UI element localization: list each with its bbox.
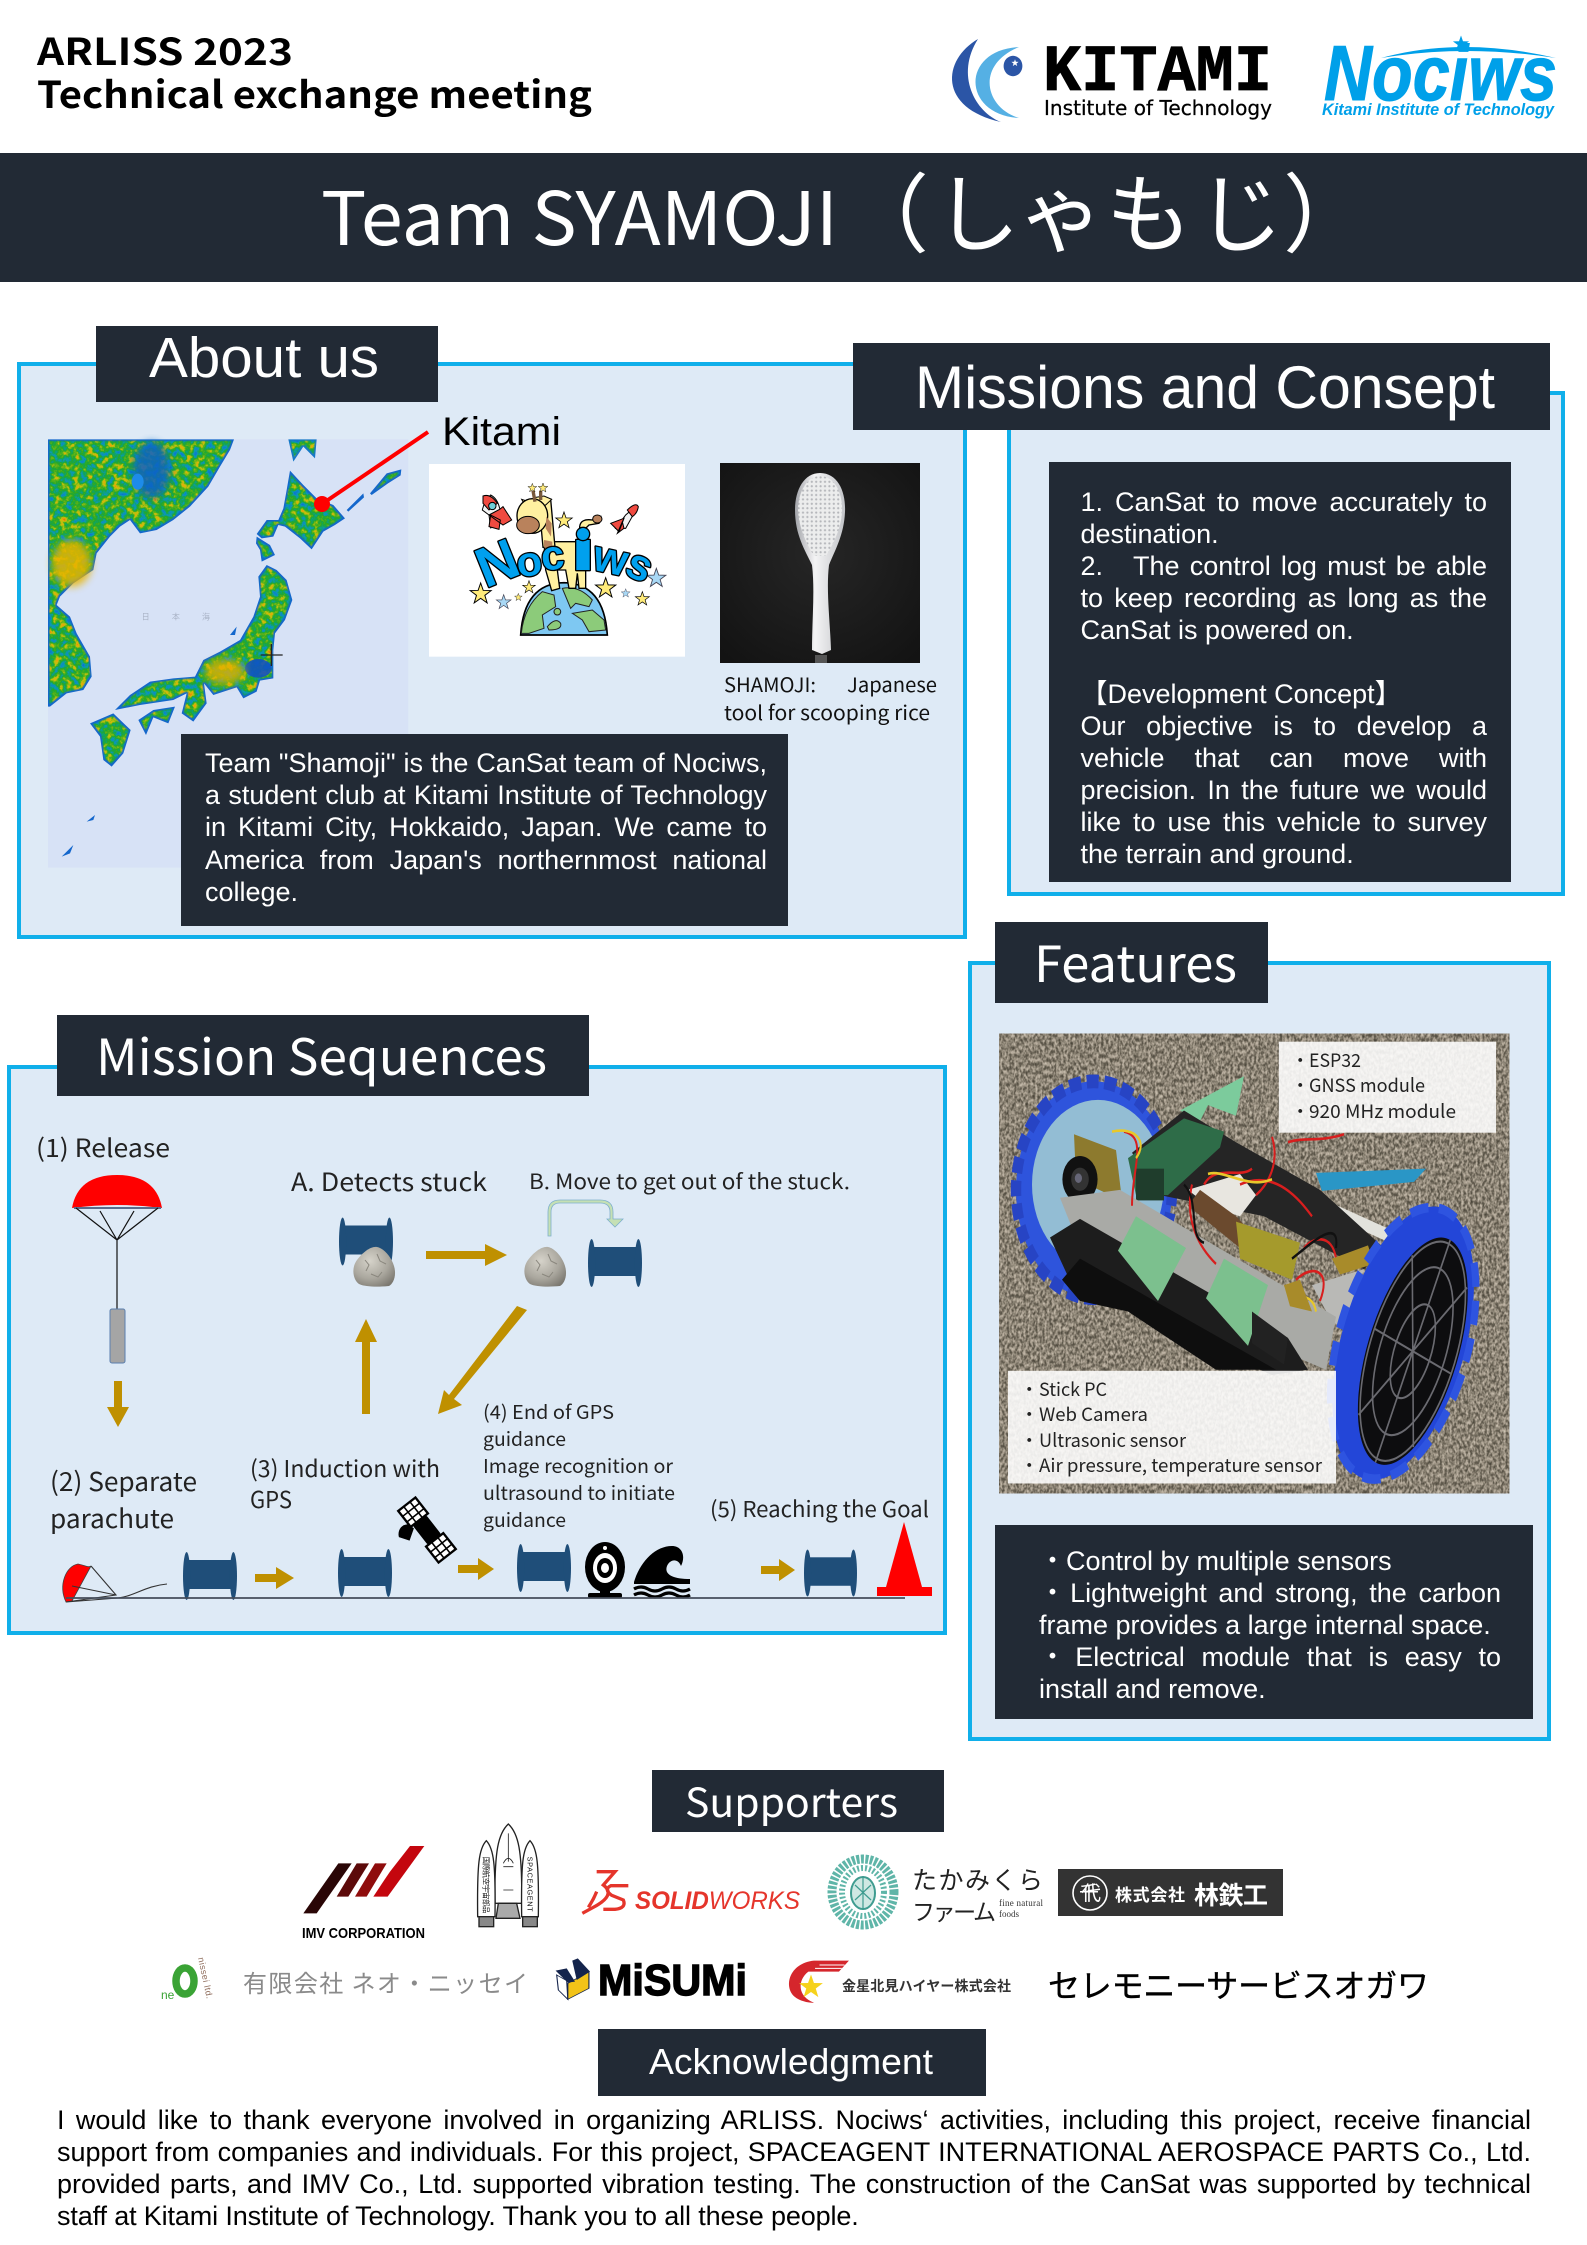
text box: mission list and development concept: to keep recording as long as the bbox=[1080, 583, 1487, 613]
step 2: separate parachute: (2) Separate bbox=[50, 1462, 197, 1499]
text box: team description: America from Japan's northernmost national bbox=[205, 845, 767, 875]
text box: mission list and development concept: the terrain and ground. bbox=[1080, 839, 1354, 869]
text box: mission list and development concept: 【Development Concept】 bbox=[1080, 679, 1402, 709]
step 2: separate parachute bbox=[50, 1462, 237, 1602]
panel: Features bbox=[968, 922, 1551, 1741]
map of Japan bbox=[48, 439, 408, 868]
text box: mission list and development concept bbox=[1049, 462, 1511, 882]
map of Japan: 日 本 海 bbox=[142, 611, 210, 622]
caption: what a shamoji is: tool for scooping rice bbox=[724, 697, 930, 726]
arrow: back to GPS induction bbox=[438, 1306, 527, 1414]
text box: team description: Team "Shamoji" is the CanSat team of Nociws, bbox=[205, 748, 767, 778]
step 4: end of GPS guidance: ultrasound to initiate bbox=[483, 1479, 675, 1506]
heading: Acknowledgment bbox=[598, 2029, 986, 2096]
step 2: separate parachute: parachute bbox=[50, 1499, 174, 1536]
text box: mission list and development concept: 2. The control log must be able bbox=[1080, 551, 1487, 581]
label: A. Detects stuck: A. Detects stuck bbox=[291, 1163, 487, 1199]
text box: mission list and development concept: precision. In the future we would bbox=[1080, 775, 1487, 805]
arrow: induction to end of GPS bbox=[458, 1558, 494, 1580]
text box: feature list: ・Lightweight and strong, the carbon bbox=[1039, 1578, 1501, 1608]
heading: Mission Sequences: Mission Sequences bbox=[96, 1018, 547, 1090]
panel: Missions and Consept bbox=[853, 343, 1565, 896]
step 4: end of GPS guidance bbox=[483, 1398, 675, 1533]
step 3: induction with GPS: GPS bbox=[250, 1481, 292, 1515]
Nociws mascot logo: N bbox=[467, 526, 528, 599]
step 4: end of GPS guidance: guidance bbox=[483, 1425, 566, 1452]
logo: Takamikura Farm: ファーム bbox=[912, 1893, 996, 1927]
text box: feature list: ・Electrical module that is easy to bbox=[1039, 1642, 1501, 1672]
logo: Spaceagent: 国際航空宇宙部品 bbox=[480, 1857, 491, 1913]
step 1: release with parachute: (1) Release bbox=[36, 1129, 170, 1165]
arrow: separate to induction bbox=[255, 1567, 294, 1589]
label: top components list: ・ bbox=[1291, 1098, 1310, 1124]
label: bottom components list: ・ bbox=[1020, 1376, 1039, 1402]
text box: feature list: frame provides a large internal space. bbox=[1039, 1610, 1491, 1640]
text box: team description bbox=[181, 734, 788, 926]
ground line bbox=[66, 1597, 905, 1599]
label: top components list: GNSS module bbox=[1309, 1072, 1425, 1098]
label: bottom components list: Ultrasonic sensor bbox=[1039, 1427, 1187, 1453]
label: top components list: ・ bbox=[1291, 1047, 1310, 1073]
event title bbox=[36, 22, 592, 119]
logo: MiSUMi: MiSUMi bbox=[598, 1956, 747, 2005]
logo: SolidWorks bbox=[582, 1872, 800, 1915]
text box: feature list: install and remove. bbox=[1039, 1674, 1266, 1704]
logo: Kitami Institute of Technology: KITAMI bbox=[1043, 35, 1272, 110]
section: Supporters bbox=[161, 1770, 1429, 2007]
label: top components list bbox=[1291, 1047, 1456, 1124]
step 3: induction with GPS: (3) Induction with bbox=[250, 1450, 440, 1484]
icon: web camera bbox=[585, 1542, 625, 1598]
step 4: end of GPS guidance: Image recognition or bbox=[483, 1452, 674, 1479]
text box: mission list and development concept: 1. CanSat to move accurately to bbox=[1080, 487, 1487, 517]
Nociws mascot logo bbox=[429, 464, 685, 657]
step 5: reaching the goal bbox=[710, 1492, 932, 1597]
logo: Neo Nissei: ne bbox=[161, 1988, 175, 2002]
logo: Nociws: Kitami Institute of Technology bbox=[1322, 100, 1555, 119]
caption: what a shamoji is: SHAMOJI: bbox=[724, 669, 816, 698]
label: bottom components list: ・ bbox=[1020, 1427, 1039, 1453]
text: thanks paragraph: I would like to thank everyone involved in organizing ARLISS. Nociws‘ activities, including this project, receive financial bbox=[57, 2105, 1531, 2135]
label: bottom components list bbox=[1020, 1376, 1323, 1478]
logo: Hayashi Tekko: 千代 bbox=[1079, 1877, 1101, 1906]
label: top components list: ・ bbox=[1291, 1072, 1310, 1098]
logo: Neo Nissei: 有限会社 ネオ・ニッセイ bbox=[243, 1964, 528, 1999]
text box: mission list and development concept: destination. bbox=[1080, 519, 1219, 549]
header: event name and logos bbox=[36, 22, 1557, 122]
logo: Hayashi Tekko bbox=[1058, 1869, 1283, 1916]
Kitami label with pointer: Kitami bbox=[442, 410, 561, 454]
event title: Technical exchange meeting bbox=[37, 65, 592, 119]
heading: Features bbox=[995, 922, 1268, 1003]
title banner: Team SYAMOJI bbox=[321, 160, 838, 267]
Nociws mascot logo: s bbox=[619, 539, 661, 593]
step 1: release with parachute bbox=[36, 1129, 170, 1363]
heading: About us bbox=[96, 326, 438, 402]
Nociws mascot logo: o bbox=[513, 536, 545, 586]
logo: Neo Nissei: nissei ltd. bbox=[196, 1956, 215, 1999]
text box: mission list and development concept: like to use this vehicle to survey bbox=[1080, 807, 1487, 837]
logo: Kinsei Kitami Hire: 金星北見ハイヤー株式会社 bbox=[842, 1976, 1011, 1996]
caption: what a shamoji is bbox=[724, 669, 937, 726]
text: thanks paragraph: staff at Kitami Institute of Technology. Thank you to all these people. bbox=[57, 2201, 859, 2231]
text box: feature list: ・Control by multiple sensors bbox=[1039, 1546, 1392, 1576]
section: Acknowledgment bbox=[57, 2029, 1531, 2231]
logo: Kinsei Kitami Hire bbox=[789, 1961, 1011, 2003]
label: bottom components list: Stick PC bbox=[1039, 1376, 1107, 1402]
icon: rover in step 4 bbox=[517, 1544, 571, 1592]
event title: ARLISS 2023 bbox=[36, 22, 293, 76]
Nociws mascot logo: w bbox=[588, 531, 633, 586]
logo: Kitami Institute of Technology bbox=[952, 35, 1272, 122]
heading: Supporters: Supporters bbox=[685, 1771, 898, 1829]
logo: Spaceagent: SPACEAGENT bbox=[526, 1857, 535, 1912]
heading: Features: Features bbox=[1034, 925, 1237, 997]
heading: Acknowledgment: Acknowledgment bbox=[649, 2041, 933, 2082]
panel: Mission Sequences bbox=[7, 1015, 947, 1635]
text box: feature list bbox=[995, 1525, 1533, 1719]
text: thanks paragraph: support from companies and individuals. For this project, SPACEAGENT INTERNATIONAL AEROSPACE PARTS Co., Ltd. bbox=[57, 2137, 1531, 2167]
Kitami label with pointer bbox=[314, 410, 561, 512]
arrow: induction to detect stuck bbox=[355, 1319, 377, 1414]
text box: mission list and development concept: vehicle that can move with bbox=[1080, 743, 1487, 773]
text box: mission list and development concept: CanSat is powered on. bbox=[1080, 615, 1354, 645]
label: bottom components list: ・ bbox=[1020, 1452, 1039, 1478]
logo: Kitami Institute of Technology: Institute of Technology bbox=[1044, 96, 1272, 120]
photo: shamoji rice paddle bbox=[720, 463, 920, 663]
label: top components list: ESP32 bbox=[1309, 1047, 1361, 1073]
arrow: release to separate bbox=[107, 1381, 129, 1427]
logo: Neo Nissei bbox=[161, 1956, 528, 2002]
Nociws mascot logo: c bbox=[538, 530, 566, 580]
logo: IMV Corporation bbox=[302, 1846, 425, 1942]
heading: Missions and Consept bbox=[853, 343, 1550, 430]
heading: Supporters bbox=[652, 1770, 944, 1832]
heading: About us: About us bbox=[149, 326, 379, 390]
logo: Hayashi Tekko: 株式会社 bbox=[1115, 1881, 1185, 1906]
text: thanks paragraph: provided parts, and IMV Co., Ltd. supported vibration testing. The construction of the CanSat was supported by technical bbox=[57, 2169, 1531, 2199]
photo: assembled rover with labels bbox=[999, 1034, 1510, 1494]
title banner bbox=[0, 153, 1587, 282]
logo: Takamikura Farm: fine natural bbox=[999, 1898, 1043, 1908]
logo: Takamikura Farm: たかみくら bbox=[912, 1861, 1043, 1897]
logo: Spaceagent bbox=[478, 1824, 538, 1927]
step 4: end of GPS guidance: (4) End of GPS bbox=[483, 1398, 614, 1425]
arrow: guidance to goal bbox=[761, 1559, 795, 1581]
label: bottom components list: Web Camera bbox=[1039, 1401, 1148, 1427]
label: bottom components list: ・ bbox=[1020, 1401, 1039, 1427]
step 4: end of GPS guidance: guidance bbox=[483, 1506, 566, 1533]
icon: ultrasound wave bbox=[634, 1546, 690, 1597]
logo: IMV Corporation: IMV CORPORATION bbox=[302, 1925, 425, 1942]
logo: SolidWorks: SOLIDWORKS bbox=[635, 1887, 800, 1915]
step 3: induction with GPS bbox=[250, 1450, 440, 1597]
label: top components list: 920 MHz module bbox=[1309, 1098, 1456, 1124]
step 5: reaching the goal: (5) Reaching the Goal bbox=[710, 1492, 929, 1524]
text box: team description: college. bbox=[205, 877, 298, 907]
logo: Takamikura Farm bbox=[832, 1859, 1043, 1927]
text box: mission list and development concept: Our objective is to develop a bbox=[1080, 711, 1487, 741]
arrow: detect to move bbox=[426, 1244, 507, 1266]
panel: About us bbox=[17, 326, 967, 939]
text box: team description: in Kitami City, Hokkaido, Japan. We came to bbox=[205, 812, 767, 842]
label: bottom components list: Air pressure, temperature sensor bbox=[1039, 1452, 1323, 1478]
icon: GPS satellite bbox=[386, 1497, 456, 1572]
label: B. Move out of stuck: B. Move to get out of the stuck. bbox=[529, 1166, 850, 1196]
caption: what a shamoji is: Japanese bbox=[847, 669, 937, 698]
icon: rock and rover past it, with bypass arrow bbox=[524, 1200, 642, 1287]
logo: Ceremony Service Ogawa: セレモニーサービスオガワ bbox=[1048, 1961, 1429, 2007]
text box: team description: a student club at Kitami Institute of Technology bbox=[205, 780, 767, 810]
icon: rover stuck behind rock bbox=[339, 1218, 395, 1287]
logo: Hayashi Tekko: 林鉄工 bbox=[1194, 1876, 1268, 1912]
logo: Takamikura Farm: foods bbox=[999, 1909, 1019, 1919]
text: thanks paragraph bbox=[57, 2105, 1531, 2231]
heading: Missions and Consept: Missions and Consept bbox=[915, 354, 1495, 421]
